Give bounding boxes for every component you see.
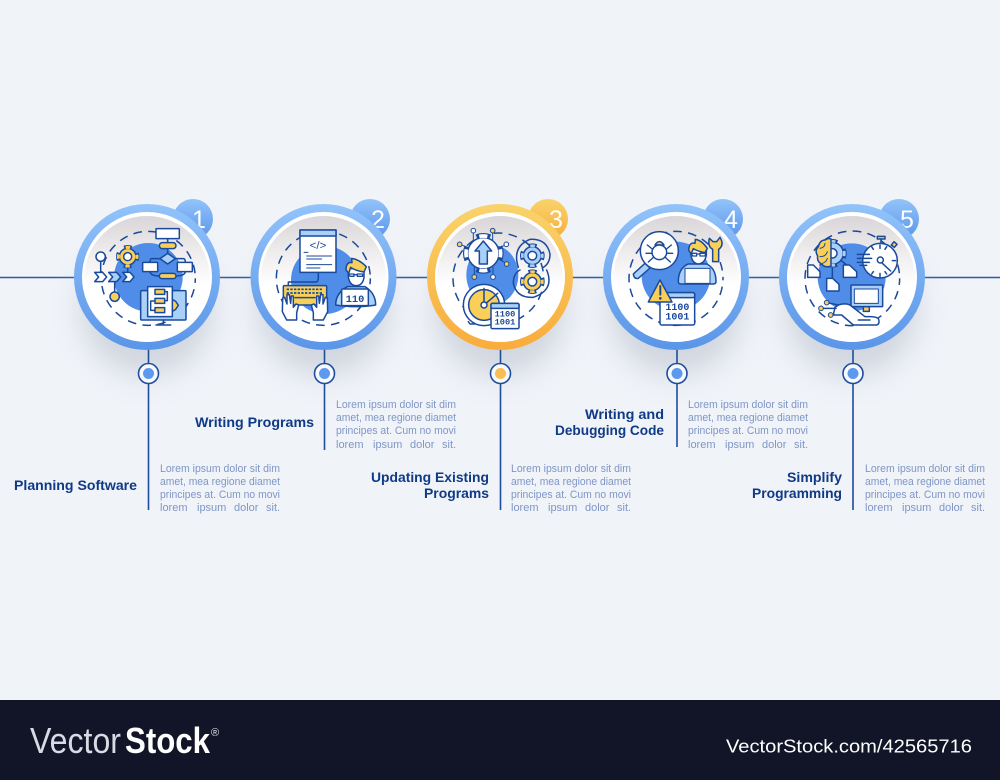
text block 4: Lorem ipsum dolor sit dim: [688, 399, 808, 411]
ring 4: [603, 204, 749, 350]
icon: debugging: 1001: [665, 311, 689, 322]
footer bar: [0, 700, 1000, 780]
code symbol: </>: [310, 240, 326, 252]
text block 2: principes at. Cum no movi: [336, 425, 456, 437]
text block 1: ipsum: [197, 502, 226, 514]
footer image id: VectorStock.com/42565716: [726, 736, 972, 756]
number badge 3: [528, 199, 568, 239]
heading 1: Planning Software: [14, 477, 137, 493]
text block 1: dolor: [234, 502, 259, 514]
footer logo: Stock: [125, 720, 211, 761]
text block 3: Lorem ipsum dolor sit dim: [511, 463, 631, 475]
text block 4: amet, mea regione diamet: [688, 412, 808, 424]
text block 5: Lorem ipsum dolor sit dim: [865, 463, 985, 475]
text block 3: lorem: [511, 502, 539, 514]
text block 3: amet, mea regione diamet: [511, 476, 631, 488]
text block 2: Lorem ipsum dolor sit dim: [336, 399, 456, 411]
text block 5: lorem: [865, 502, 893, 514]
number badge 4: [703, 199, 743, 239]
text block 5: [865, 463, 985, 514]
icon: update gears and clock: [453, 228, 550, 329]
text block 1: lorem: [160, 502, 188, 514]
text block 3: dolor: [585, 502, 610, 514]
connector node 4: [667, 364, 687, 384]
connector node 5: [843, 364, 863, 384]
text block 5: dolor: [939, 502, 964, 514]
connector node 1: [138, 364, 158, 384]
ring 5: [779, 204, 925, 350]
icon: debugging: [629, 231, 723, 325]
text block 2: dolor: [410, 439, 435, 451]
heading 3: Updating Existing: [371, 469, 489, 485]
text block 2: amet, mea regione diamet: [336, 412, 456, 424]
icon: brain, stopwatch, monitor in hand: [805, 231, 900, 326]
text block 3: principes at. Cum no movi: [511, 489, 631, 501]
number badge 4: 4: [724, 206, 738, 234]
icon: flowchart and monitor: [95, 229, 195, 325]
text block 4: ipsum: [725, 439, 754, 451]
number badge 5: [879, 199, 919, 239]
step 2: writing programs: [195, 199, 456, 451]
text block 1: sit.: [266, 502, 280, 514]
heading 3: [371, 469, 489, 501]
heading 4: [555, 406, 664, 438]
heading 2: Writing Programs: [195, 414, 314, 430]
text block 4: lorem: [688, 439, 716, 451]
text block 5: ipsum: [902, 502, 931, 514]
step 5: simplify programming: [752, 199, 985, 514]
text block 2: [336, 399, 456, 451]
text block 1: principes at. Cum no movi: [160, 489, 280, 501]
text block 2: sit.: [442, 439, 456, 451]
ring 3: [427, 204, 573, 350]
icon: coder and keyboard: 110: [346, 294, 364, 306]
text block 4: [688, 399, 808, 451]
text block 1: Lorem ipsum dolor sit dim: [160, 463, 280, 475]
number badge 1: [173, 199, 213, 239]
text block 5: sit.: [971, 502, 985, 514]
number badge 5: 5: [900, 206, 914, 234]
heading 5: [752, 469, 842, 501]
connector node 3: [490, 364, 510, 384]
step 4: writing and debugging code: [555, 199, 808, 451]
text block 2: lorem: [336, 439, 364, 451]
text block 3: ipsum: [548, 502, 577, 514]
number badge 2: 2: [371, 206, 385, 234]
footer logo: ®: [211, 727, 219, 739]
text block 1: amet, mea regione diamet: [160, 476, 280, 488]
heading 5: Simplify: [787, 469, 842, 485]
heading 4: Writing and: [585, 406, 664, 422]
text block 4: dolor: [762, 439, 787, 451]
icon: update gears and clock: 1100: [495, 310, 515, 320]
step 1: planning software: [14, 199, 280, 514]
step 3: updating existing programs: [371, 199, 631, 514]
heading 3: Programs: [424, 485, 489, 501]
connector node 2: [314, 364, 334, 384]
number badge 3: 3: [549, 206, 563, 234]
number badge 1: 1: [192, 206, 206, 234]
text block 1: [160, 463, 280, 514]
ring 2: [250, 204, 396, 350]
text block 4: principes at. Cum no movi: [688, 425, 808, 437]
text block 2: ipsum: [373, 439, 402, 451]
icon: update gears and clock: 1001: [495, 317, 515, 327]
text block 5: amet, mea regione diamet: [865, 476, 985, 488]
icon: coder and keyboard: [276, 230, 376, 325]
footer logo: Vector: [30, 720, 121, 761]
heading 5: Programming: [752, 485, 842, 501]
ring 1: [74, 204, 220, 350]
icon: debugging: 1100: [665, 302, 689, 313]
number badge 2: [350, 199, 390, 239]
footer logo: [30, 720, 219, 761]
text block 5: principes at. Cum no movi: [865, 489, 985, 501]
text block 4: sit.: [794, 439, 808, 451]
text block 3: [511, 463, 631, 514]
heading 4: Debugging Code: [555, 422, 664, 438]
text block 3: sit.: [617, 502, 631, 514]
